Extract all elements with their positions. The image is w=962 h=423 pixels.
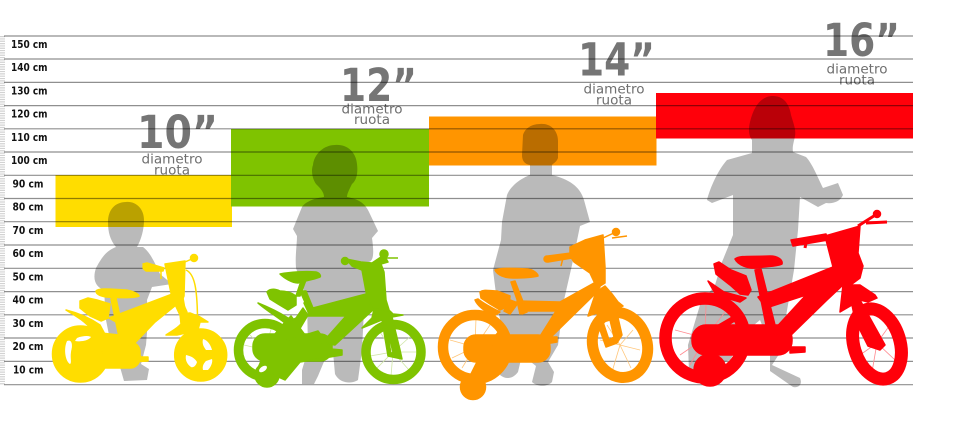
heading: 16 inch: 16” [823,14,900,67]
seat [96,289,139,298]
height scale labels: 120 cm [11,108,48,120]
fork and fender [362,309,403,359]
size band: orange 14 inch [429,116,656,166]
front wheel [844,303,910,385]
bike: green 12 inch [238,250,421,387]
bike: orange 14 inch [443,228,656,400]
heading: 14 inch [578,34,655,108]
heading: 12 inch: ruota [354,112,390,128]
heading: 10 inch: 10” [137,106,218,159]
height scale labels: 90 cm [12,178,44,190]
heading: 10 inch: diametro [142,152,202,168]
height scale labels: 20 cm [12,341,44,353]
heading: 10 inch: ruota [154,162,190,178]
height scale labels: 130 cm [11,86,48,98]
height scale labels: 70 cm [12,225,44,237]
rear wheel [52,326,108,382]
height scale labels: 100 cm [11,155,48,167]
heading: 14 inch: 14” [578,34,655,86]
mudguard wing [475,299,500,316]
size band: green 12 inch [231,129,429,206]
frame [517,283,600,341]
bike: yellow 10 inch [52,254,227,382]
heading: 14 inch: ruota [596,92,632,108]
seat [280,272,320,283]
heading: 16 inch: diametro [826,62,888,78]
spokes [244,326,417,376]
heading: 12 inch [340,59,417,128]
heading: 12 inch: 12” [340,59,417,112]
frame [758,267,843,340]
size band: red 16 inch [656,93,913,138]
fender and fork [166,313,208,335]
height scale labels: 60 cm [12,248,44,260]
child silhouette: toddler [94,202,172,381]
handlebar and stem [346,255,390,313]
child silhouette: boy 12 inch group [293,145,378,384]
height scale labels: 30 cm [12,318,44,330]
child silhouette: boy 14 inch group [493,124,590,386]
fork and fender [840,285,885,350]
height scale labels [11,39,48,376]
handlebar and stem [570,235,605,288]
height scale labels: 140 cm [11,62,48,74]
spokes [450,318,640,372]
frame [109,293,186,347]
front wheel [366,324,421,380]
height scale labels: 10 cm [13,364,44,376]
height scale labels: 150 cm [11,39,48,51]
chain guard and stabilizer [464,335,550,362]
chain guard and stabilizer [692,325,792,355]
heading: 16 inch: ruota [839,72,875,88]
height scale labels: 40 cm [12,294,44,306]
basket [480,290,510,310]
handlebar and stem [143,261,187,315]
height grid lines [4,36,913,385]
heading: 14 inch: diametro [584,82,644,98]
chain guard [72,342,140,368]
seat [735,256,782,268]
rear wheel [666,298,744,378]
child silhouette: boy 16 inch group [688,96,843,387]
basket [80,298,110,321]
mudguard wing [66,310,108,340]
heading: 10 inch [137,106,218,178]
height scale labels: 80 cm [12,202,44,214]
front wheel [584,305,656,385]
frame [300,291,374,345]
spokes [675,305,895,372]
height scale labels: 50 cm [12,272,44,284]
fork and fender [588,286,623,347]
heading: 16 inch [823,14,900,88]
basket [714,262,751,295]
front wheel [175,329,227,381]
rear wheel [443,315,507,379]
handlebar and stem [825,226,863,286]
bike: red 16 inch [666,210,910,386]
mudguard wing [708,281,746,302]
rear wheel [238,324,292,376]
size band: yellow 10 inch [56,175,232,227]
basket [267,289,296,310]
chain guard and stabilizer [253,334,332,361]
seat [495,268,538,278]
mudguard wing [258,303,288,323]
height scale labels: 110 cm [11,132,48,144]
heading: 12 inch: diametro [342,102,402,118]
